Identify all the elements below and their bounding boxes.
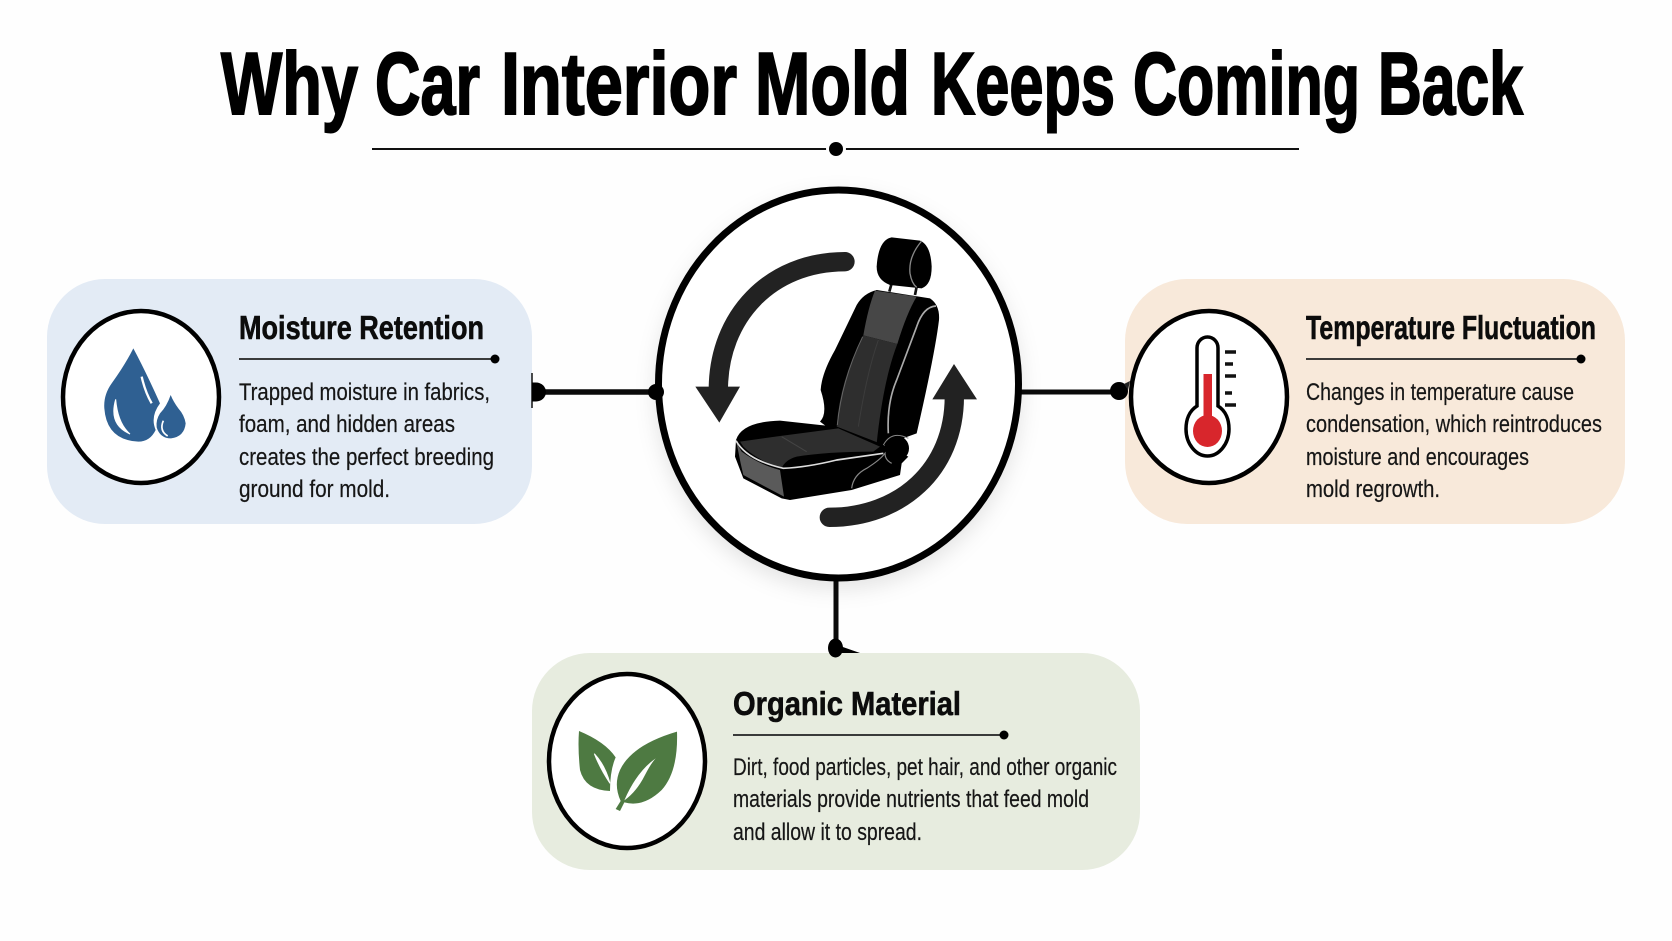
heading rule: [1306, 354, 1586, 364]
connector: right: [1020, 381, 1130, 400]
title: Interior: [501, 34, 737, 133]
icon: car seat: [735, 237, 939, 500]
body text: materials provide nutrients that feed mold: [733, 786, 1089, 813]
title divider: [372, 139, 1299, 159]
body text: [733, 754, 1117, 846]
body text: mold regrowth.: [1306, 476, 1440, 503]
body text: ground for mold.: [239, 476, 390, 503]
panel: temperature fluctuation: [1125, 279, 1625, 524]
body text: [239, 379, 494, 503]
arrow: counter-clockwise bottom-right: [829, 364, 977, 517]
title: Coming: [1133, 34, 1360, 133]
body text: condensation, which reintroduces: [1306, 411, 1602, 438]
body text: Trapped moisture in fabrics,: [239, 379, 490, 406]
title: Car: [375, 34, 480, 133]
title: Why: [221, 34, 358, 133]
body text: creates the perfect breeding: [239, 444, 494, 471]
title: Mold: [755, 34, 910, 133]
heading: Moisture Retention: [239, 309, 484, 346]
icon: leaves: [549, 674, 705, 848]
heading rule: [733, 730, 1008, 740]
title: Back: [1378, 34, 1524, 133]
panel: moisture retention: [47, 279, 532, 524]
central hub: car seat in cycle: [648, 190, 1018, 578]
arrow: counter-clockwise top-left: [695, 262, 845, 423]
panel: organic material: [532, 653, 1140, 870]
heading rule: [239, 354, 500, 364]
heading: Organic Material: [733, 685, 961, 722]
icon: thermometer: [1131, 311, 1287, 483]
body text: moisture and encourages: [1306, 444, 1529, 471]
body text: Dirt, food particles, pet hair, and other organic: [733, 754, 1117, 781]
body text: Changes in temperature cause: [1306, 379, 1574, 406]
icon: water drops: [63, 311, 219, 483]
title: [221, 34, 1524, 133]
body text: and allow it to spread.: [733, 819, 922, 846]
body text: [1306, 379, 1602, 503]
title: Keeps: [931, 34, 1115, 133]
connector: bottom: [828, 578, 860, 658]
body text: foam, and hidden areas: [239, 411, 455, 438]
connector: left: [532, 373, 656, 408]
